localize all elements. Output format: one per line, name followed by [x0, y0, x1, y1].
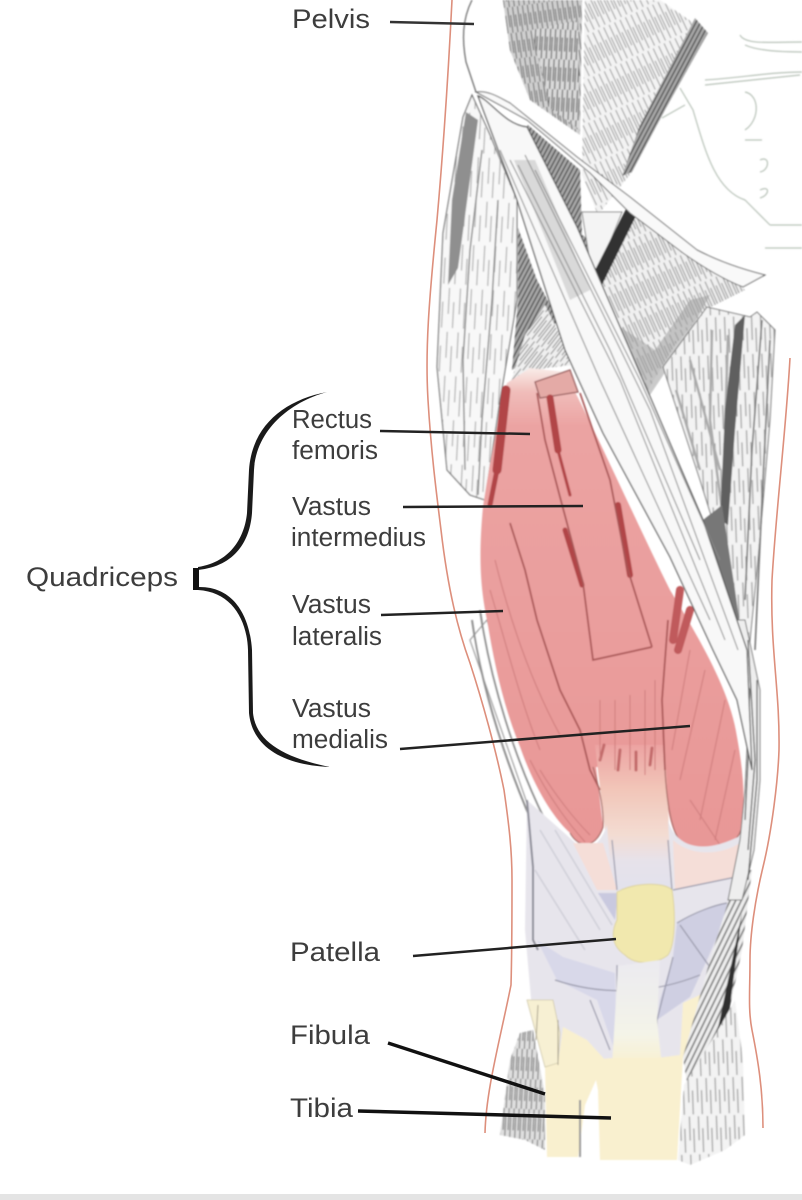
- lower right tendons: [678, 1000, 745, 1165]
- label: Rectus femoris: Rectus: [292, 406, 372, 434]
- label: Vastus intermedius: [291, 493, 583, 552]
- muscle: lower adductor dark: [512, 228, 558, 370]
- muscle: central dark wedge: [515, 125, 600, 290]
- lateral dark band: [693, 913, 742, 1090]
- label: Fibula: Fibula: [290, 1020, 371, 1050]
- outer band line: [472, 610, 545, 825]
- muscle: psoas fan: [582, 0, 708, 215]
- muscle: upper adductor: [503, 0, 582, 135]
- fibula shaft: [545, 1027, 607, 1157]
- knee capsule: [525, 800, 748, 1060]
- knee: warm area right of tendon: [673, 840, 740, 890]
- sartorius fibres: [500, 150, 738, 650]
- label: Vastus lateralis: lateralis: [292, 623, 382, 651]
- muscle: seams and fibres: [510, 393, 668, 790]
- lateral fibre band: [683, 870, 752, 1090]
- label: Vastus lateralis: [292, 591, 503, 651]
- knee: diagonal fascia lines: [535, 830, 612, 950]
- sartorius upper fibres: [514, 160, 590, 300]
- label: Fibula: [290, 1020, 545, 1094]
- skin outlines: [427, 0, 790, 1133]
- knee: pale central tendon: [612, 960, 662, 1066]
- label: Quadriceps: Quadriceps: [26, 562, 178, 592]
- thigh outer bands: [470, 620, 590, 850]
- knee: lower left violet: [537, 940, 617, 1057]
- muscle: psoas dark edge: [622, 18, 708, 176]
- label: Rectus femoris: femoris: [292, 437, 378, 465]
- brace: [198, 392, 330, 767]
- shin left fibres: [500, 1030, 545, 1150]
- muscle: gracilis dark line: [720, 315, 745, 525]
- knee: warm area left of tendon: [573, 843, 617, 890]
- muscle: adductor longus shade: [610, 295, 710, 395]
- label: Patella: [290, 937, 616, 967]
- muscle: TFL shading: [448, 112, 478, 285]
- muscle: lower adductor: [510, 305, 575, 385]
- muscle: pectineus triangle: [582, 212, 622, 272]
- label: Vastus medialis: medialis: [292, 726, 388, 754]
- muscle: quadriceps tendon: [595, 745, 672, 890]
- muscle: dark strip: [592, 205, 640, 285]
- muscle: line beside gracilis: [745, 320, 770, 650]
- knee: medial violet area: [657, 903, 727, 1020]
- muscle: adductor dark centre: [532, 20, 580, 130]
- inguinal ligament: [476, 92, 765, 287]
- knee: lateral violet area: [598, 893, 618, 920]
- gap dark mark: [579, 1100, 581, 1157]
- muscle: dark V wedge: [703, 505, 745, 660]
- thigh muscles drawing: [437, 0, 802, 1165]
- label: Vastus medialis: Vastus: [292, 695, 371, 723]
- label: Patella: Patella: [290, 937, 381, 967]
- label: Vastus medialis: [292, 695, 690, 754]
- label: Vastus intermedius: intermedius: [291, 524, 426, 552]
- muscle: rectus femoris stump: [535, 370, 578, 398]
- muscle: adductor longus: [600, 210, 745, 395]
- muscle: dark red patches: [490, 390, 690, 770]
- white ridge band: [712, 620, 760, 900]
- fibula head: [527, 1000, 560, 1067]
- fibula inner line: [536, 1005, 558, 1065]
- bottom edge strip: [0, 1194, 802, 1200]
- muscle: medial border: [665, 770, 741, 852]
- pelvis crest: [464, 0, 476, 92]
- knee: outlines: [555, 840, 736, 1057]
- label: Rectus femoris: [292, 406, 530, 465]
- muscle: tensor fasciae latae: [437, 95, 517, 500]
- muscle: TFL second line: [463, 150, 498, 495]
- muscle: gracilis group: [663, 307, 775, 660]
- knee: grey left band: [527, 800, 538, 950]
- label: Pelvis: Pelvis: [292, 4, 370, 34]
- brace tick: [193, 568, 199, 590]
- muscle: lateral end border: [570, 767, 603, 844]
- abdominal faint lines: [662, 35, 802, 248]
- tibia body: [592, 990, 723, 1160]
- muscle: quadriceps pink mass: [480, 368, 744, 852]
- muscle: inner streaks: [676, 330, 728, 510]
- label: Tibia: [290, 1093, 611, 1123]
- label: Vastus intermedius: Vastus: [292, 493, 371, 521]
- sartorius band: [478, 96, 752, 770]
- label: Tibia: Tibia: [290, 1093, 354, 1123]
- label: Vastus lateralis: Vastus: [292, 591, 371, 619]
- patella: [613, 884, 674, 962]
- ridge fibres: [738, 640, 757, 880]
